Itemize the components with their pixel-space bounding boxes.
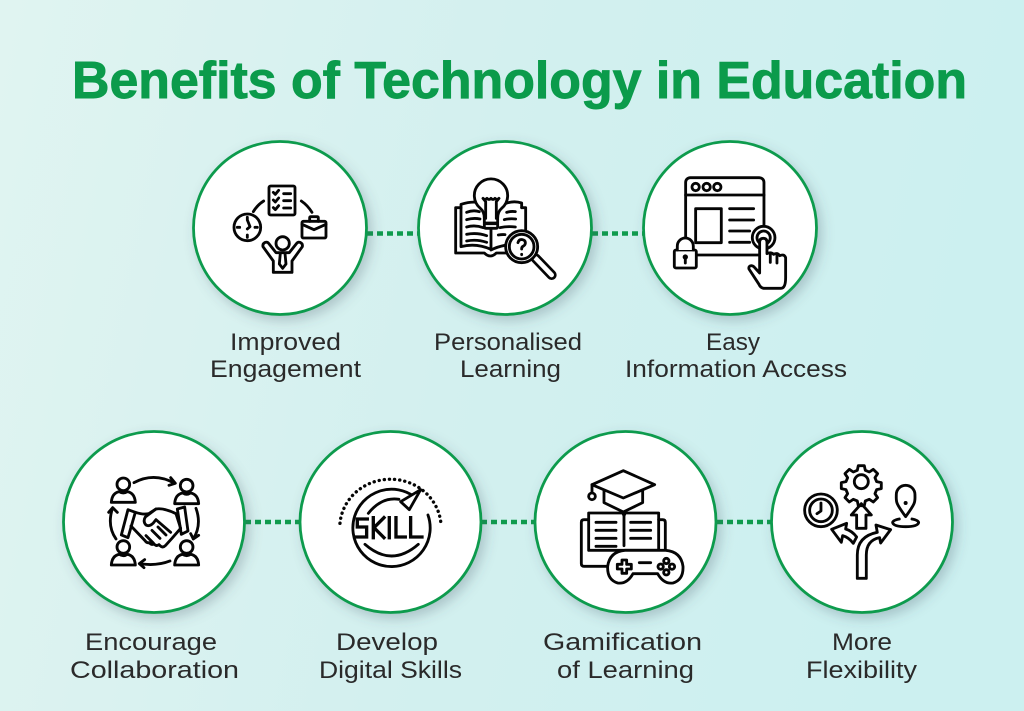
label bbox=[210, 329, 361, 383]
panel: easy information access bbox=[625, 142, 847, 383]
label bbox=[806, 629, 917, 684]
panel: personalised learning bbox=[418, 142, 592, 383]
panel: more flexibility bbox=[772, 432, 952, 684]
label: Collaboration bbox=[70, 657, 239, 684]
label: Learning bbox=[460, 356, 561, 383]
label: Gamification bbox=[543, 629, 702, 656]
panel: gamification of learning bbox=[535, 432, 716, 684]
label: More bbox=[832, 629, 892, 656]
label bbox=[543, 629, 702, 684]
circle bbox=[644, 142, 816, 314]
circle bbox=[772, 432, 952, 612]
circle bbox=[418, 142, 592, 314]
label: Develop bbox=[336, 629, 438, 656]
connector: top row 1 bbox=[367, 231, 419, 236]
connector: bottom row 1 bbox=[245, 520, 301, 524]
icon: book, light bulb, magnifier bbox=[456, 179, 552, 275]
label: Improved bbox=[230, 329, 341, 356]
icon: branching arrows, gear, clock, pin bbox=[805, 466, 919, 578]
connector: bottom row 3 bbox=[717, 520, 772, 524]
panel: improved engagement bbox=[194, 142, 366, 383]
circle bbox=[64, 432, 244, 612]
circle bbox=[300, 432, 481, 612]
label bbox=[70, 629, 239, 684]
connector: top row 2 bbox=[592, 231, 644, 236]
panel: develop digital skills bbox=[300, 432, 481, 684]
label bbox=[434, 329, 582, 383]
title: Benefits of Technology in Education bbox=[72, 52, 967, 110]
icon: skill gauge bbox=[340, 479, 441, 567]
circle bbox=[535, 432, 716, 612]
icon: browser window, padlock, pointing hand bbox=[674, 178, 786, 288]
label: Engagement bbox=[210, 356, 361, 383]
icon: person, clock, checklist, briefcase bbox=[234, 186, 326, 272]
label: of Learning bbox=[557, 657, 694, 684]
icon: handshake with four people bbox=[109, 477, 199, 568]
circle bbox=[194, 142, 366, 314]
label bbox=[625, 329, 847, 383]
label: Digital Skills bbox=[319, 657, 462, 684]
icon: graduation cap, book, game controller bbox=[581, 471, 683, 583]
label: Personalised bbox=[434, 329, 582, 356]
panel: encourage collaboration bbox=[64, 432, 244, 684]
label: Easy bbox=[706, 329, 760, 356]
label: Information Access bbox=[625, 356, 847, 383]
label: Flexibility bbox=[806, 657, 917, 684]
label: Encourage bbox=[85, 629, 217, 656]
label bbox=[319, 629, 462, 684]
connector: bottom row 2 bbox=[481, 520, 536, 524]
